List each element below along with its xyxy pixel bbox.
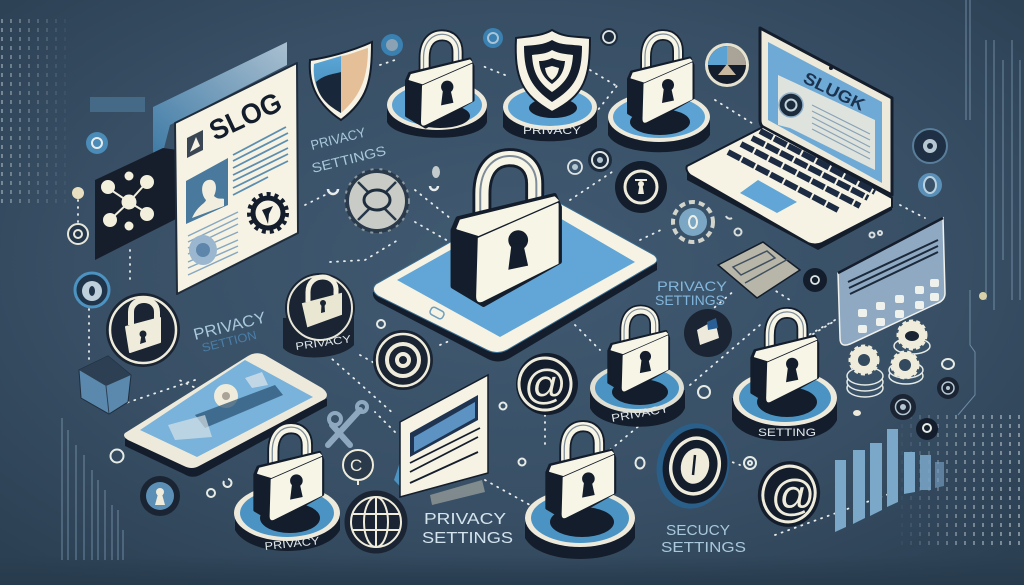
icon: small blue badge left [86, 132, 108, 154]
text: security settings: SECUCY [666, 522, 730, 539]
laptop base [687, 127, 892, 250]
icon: right badges [913, 129, 947, 197]
icon: copyright badge: C [350, 456, 362, 475]
connector dotted lines [78, 60, 925, 535]
icon: at sign center [516, 353, 578, 415]
blue panel behind document [153, 42, 287, 155]
label: PRIVACY: PRIVACY [264, 535, 321, 553]
text: security settings: SETTINGS [661, 539, 746, 556]
small rings right cluster [853, 292, 987, 440]
icon: at sign right: @ [770, 471, 815, 520]
label: PRIVACY: PRIVACY [610, 403, 670, 425]
text: privacy settings top: SETTINGS [310, 143, 387, 176]
panel: SLOG document [175, 63, 298, 294]
text: privacy settings top [309, 125, 387, 176]
text: privacy settings bottom [422, 511, 513, 547]
black network panel [95, 148, 178, 260]
background vertical lines: top right [958, 0, 1020, 415]
icon: shield [516, 30, 590, 112]
icon: at sign right [751, 454, 827, 534]
background dot matrix: bottom right [910, 415, 1020, 545]
text: privacy settings center right: PRIVACY [657, 278, 728, 294]
icon: isometric box [79, 356, 131, 414]
icon: wrench [328, 402, 367, 445]
icon: copyright badge [343, 450, 373, 485]
text: privacy setting left: SETTION [200, 328, 258, 355]
background dot matrix: top left [1, 19, 66, 203]
device: phone [124, 353, 327, 477]
label: PRIVACY: PRIVACY [295, 333, 352, 353]
padlock [609, 309, 669, 393]
pedestal lock top right [608, 34, 710, 152]
text: security settings [661, 522, 746, 556]
text: privacy setting left [192, 309, 268, 355]
icon: left blue badge [75, 273, 109, 307]
keyboard [728, 131, 875, 210]
pedestal lock bottom left [234, 427, 340, 553]
blurred phone content [168, 372, 283, 440]
icon: keyhole small badge [140, 476, 180, 516]
label: PRIVACY: PRIVACY [523, 125, 582, 137]
icon: left circle ring [68, 187, 88, 244]
text: privacy setting left: PRIVACY [192, 309, 268, 344]
heading: SLOG: SLOG [204, 86, 286, 146]
padlock [255, 427, 323, 522]
padlock [752, 312, 818, 404]
pedestal with shield [503, 30, 597, 141]
background vertical lines: bottom left [62, 418, 123, 560]
blurred header mark [90, 97, 145, 112]
laptop screen [760, 28, 892, 195]
central padlock [453, 156, 559, 304]
pedestal lock privacy [590, 309, 685, 427]
pedestal lock bottom center [525, 425, 635, 559]
padlock [407, 34, 473, 127]
icon: target ring [373, 330, 433, 390]
text: privacy settings center right: SETTINGS [655, 292, 725, 308]
icon: gear [249, 194, 287, 232]
icon: shield half blue [310, 42, 372, 120]
small rings top center [483, 28, 618, 48]
device: tablet [373, 194, 657, 362]
panel: settings card [838, 218, 945, 345]
padlock [628, 34, 693, 124]
text lines [233, 127, 288, 195]
pedestal lock top center [387, 34, 487, 138]
avatar tile [186, 158, 228, 224]
bar chart [835, 429, 944, 532]
icon: network nodes [102, 172, 153, 230]
icon: keyhole badge [615, 161, 667, 213]
device: laptop [686, 28, 892, 250]
lower text lines with seal [188, 212, 238, 275]
lock badge left [106, 293, 180, 367]
small ring glyphs near document [328, 186, 438, 194]
icon: clock badge [648, 416, 738, 516]
heading: SLUGK: SLUGK [800, 69, 869, 115]
icon: at sign center: @ [524, 361, 567, 408]
icon: badge dark with folder [684, 309, 732, 357]
icon: logo [187, 130, 203, 158]
small blue badge top [381, 34, 403, 56]
icon: globe [346, 492, 406, 552]
small rings center [568, 148, 612, 174]
padlock [547, 425, 615, 520]
label: SETTING: SETTING [758, 427, 816, 439]
text: privacy settings center right [655, 278, 728, 308]
icon: pie badge [705, 43, 749, 87]
panel: image card [394, 375, 488, 505]
lock on privacy cylinder [283, 273, 355, 357]
pedestal lock setting [732, 312, 837, 441]
text: privacy settings top: PRIVACY [309, 125, 367, 153]
text: privacy settings bottom: PRIVACY [424, 511, 506, 528]
icon: dotted ring [673, 202, 713, 242]
icon: gears stack [847, 321, 930, 397]
small envelope card [718, 242, 827, 298]
icon: dial wheel [345, 169, 409, 233]
text: privacy settings bottom: SETTINGS [422, 530, 513, 547]
touchpad [740, 180, 797, 213]
